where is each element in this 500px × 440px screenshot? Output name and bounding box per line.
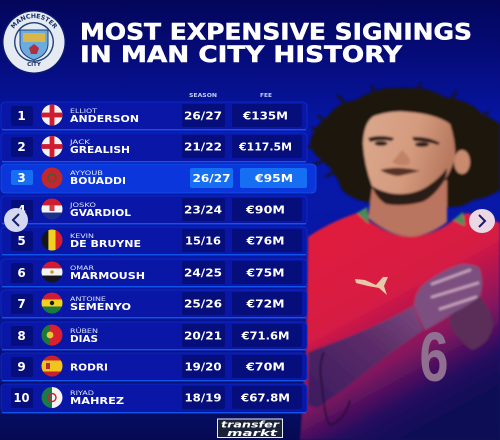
row 10: 10 — [14, 391, 30, 405]
row 2 — [1, 133, 307, 162]
title: MOST EXPENSIVE SIGNINGS — [80, 20, 472, 46]
puma logo — [355, 277, 388, 295]
row 1: ELLIOT — [70, 107, 97, 115]
row 4: GVARDIOL — [70, 208, 132, 219]
title — [80, 20, 472, 68]
row 9: 9 — [17, 360, 26, 374]
row 3 highlighted: BOUADDI — [70, 176, 126, 187]
row 4 — [1, 196, 307, 224]
other hand — [450, 292, 493, 350]
row 7: ANTOINE — [70, 295, 106, 303]
collar — [357, 207, 465, 226]
row 8: 8 — [17, 329, 26, 343]
transfermarkt logo: transfer — [221, 420, 280, 430]
row 3 highlighted: AYYOUB — [70, 169, 103, 177]
transfermarkt logo — [218, 419, 282, 439]
row 7: SEMENYO — [70, 302, 131, 313]
row 9: €70M — [245, 362, 285, 374]
column headers: SEASON — [189, 93, 217, 99]
row 4: €90M — [245, 204, 285, 216]
nose shadow — [392, 150, 410, 166]
row 2: GREALISH — [70, 145, 130, 156]
row 2: 21/22 — [184, 142, 222, 154]
face — [363, 112, 455, 202]
row 1: 26/27 — [184, 110, 222, 122]
column headers: FEE — [260, 93, 272, 99]
row 3 highlighted: 26/27 — [192, 173, 230, 185]
row 1: ANDERSON — [70, 114, 139, 125]
row 5: €76M — [245, 236, 284, 248]
wristband — [320, 352, 350, 425]
club crest — [2, 10, 66, 74]
row 10 — [1, 384, 307, 413]
row 8: 20/21 — [184, 330, 222, 342]
fingers — [432, 270, 478, 309]
row 6: OMAR — [70, 264, 95, 272]
row 1: €135M — [242, 110, 288, 122]
row 6 — [1, 259, 307, 287]
row 10: €67.8M — [240, 392, 290, 404]
row 5: DE BRUYNE — [70, 239, 141, 250]
row 8: DIAS — [70, 334, 98, 345]
row 10: MAHREZ — [70, 396, 124, 407]
hair curls — [306, 84, 488, 176]
row 6: €75M — [245, 268, 284, 280]
club crest: MANCHESTER — [10, 14, 57, 29]
row 6: 6 — [17, 266, 26, 280]
row 7: €72M — [245, 298, 284, 310]
moustache and mouth — [380, 168, 420, 176]
row 8: €71.6M — [240, 330, 290, 342]
player photo — [300, 84, 500, 440]
row 5: 5 — [17, 234, 26, 248]
transfermarkt logo: markt — [227, 429, 278, 439]
row 4: 23/24 — [184, 204, 222, 216]
row 9 — [1, 353, 307, 381]
row 3 highlighted: 3 — [17, 171, 26, 185]
row 3 highlighted: €95M — [254, 173, 293, 185]
eyebrows — [368, 136, 440, 145]
row 2: 2 — [17, 140, 26, 154]
row 4: JOSKO — [69, 201, 96, 209]
neck — [368, 180, 447, 237]
ear — [454, 150, 470, 174]
hair — [310, 88, 500, 207]
row 5 — [1, 227, 307, 255]
row 6: MARMOUSH — [70, 271, 145, 282]
row 4: 4 — [17, 203, 26, 217]
shirt — [300, 213, 500, 440]
previous arrow button — [4, 208, 28, 232]
club crest: CITY — [27, 62, 42, 68]
eyes — [374, 141, 388, 146]
row 9: RODRI — [70, 362, 108, 374]
row 5: 15/16 — [185, 236, 221, 248]
shirt number: 6 — [420, 318, 448, 396]
row 1: 1 — [17, 109, 26, 123]
hand — [414, 264, 482, 330]
column headers — [189, 93, 272, 99]
row 5: KEVIN — [70, 232, 94, 240]
row 3 highlighted — [1, 164, 316, 193]
row 8: RÚBEN — [70, 326, 98, 335]
row 1 — [1, 102, 307, 130]
row 7: 25/26 — [184, 298, 222, 310]
arm — [308, 306, 423, 408]
next arrow button — [469, 209, 495, 233]
title: IN MAN CITY HISTORY — [80, 42, 403, 68]
row 10: 18/19 — [184, 392, 222, 404]
row 7 — [1, 290, 307, 318]
row 7: 7 — [17, 297, 26, 311]
row 9: 19/20 — [184, 362, 222, 374]
row 8 — [1, 322, 307, 350]
row 2: €117.5M — [238, 142, 292, 154]
beard — [372, 168, 447, 205]
row 2: JACK — [69, 138, 91, 146]
row 6: 24/25 — [184, 268, 222, 280]
row 10: RIYAD — [70, 389, 94, 397]
